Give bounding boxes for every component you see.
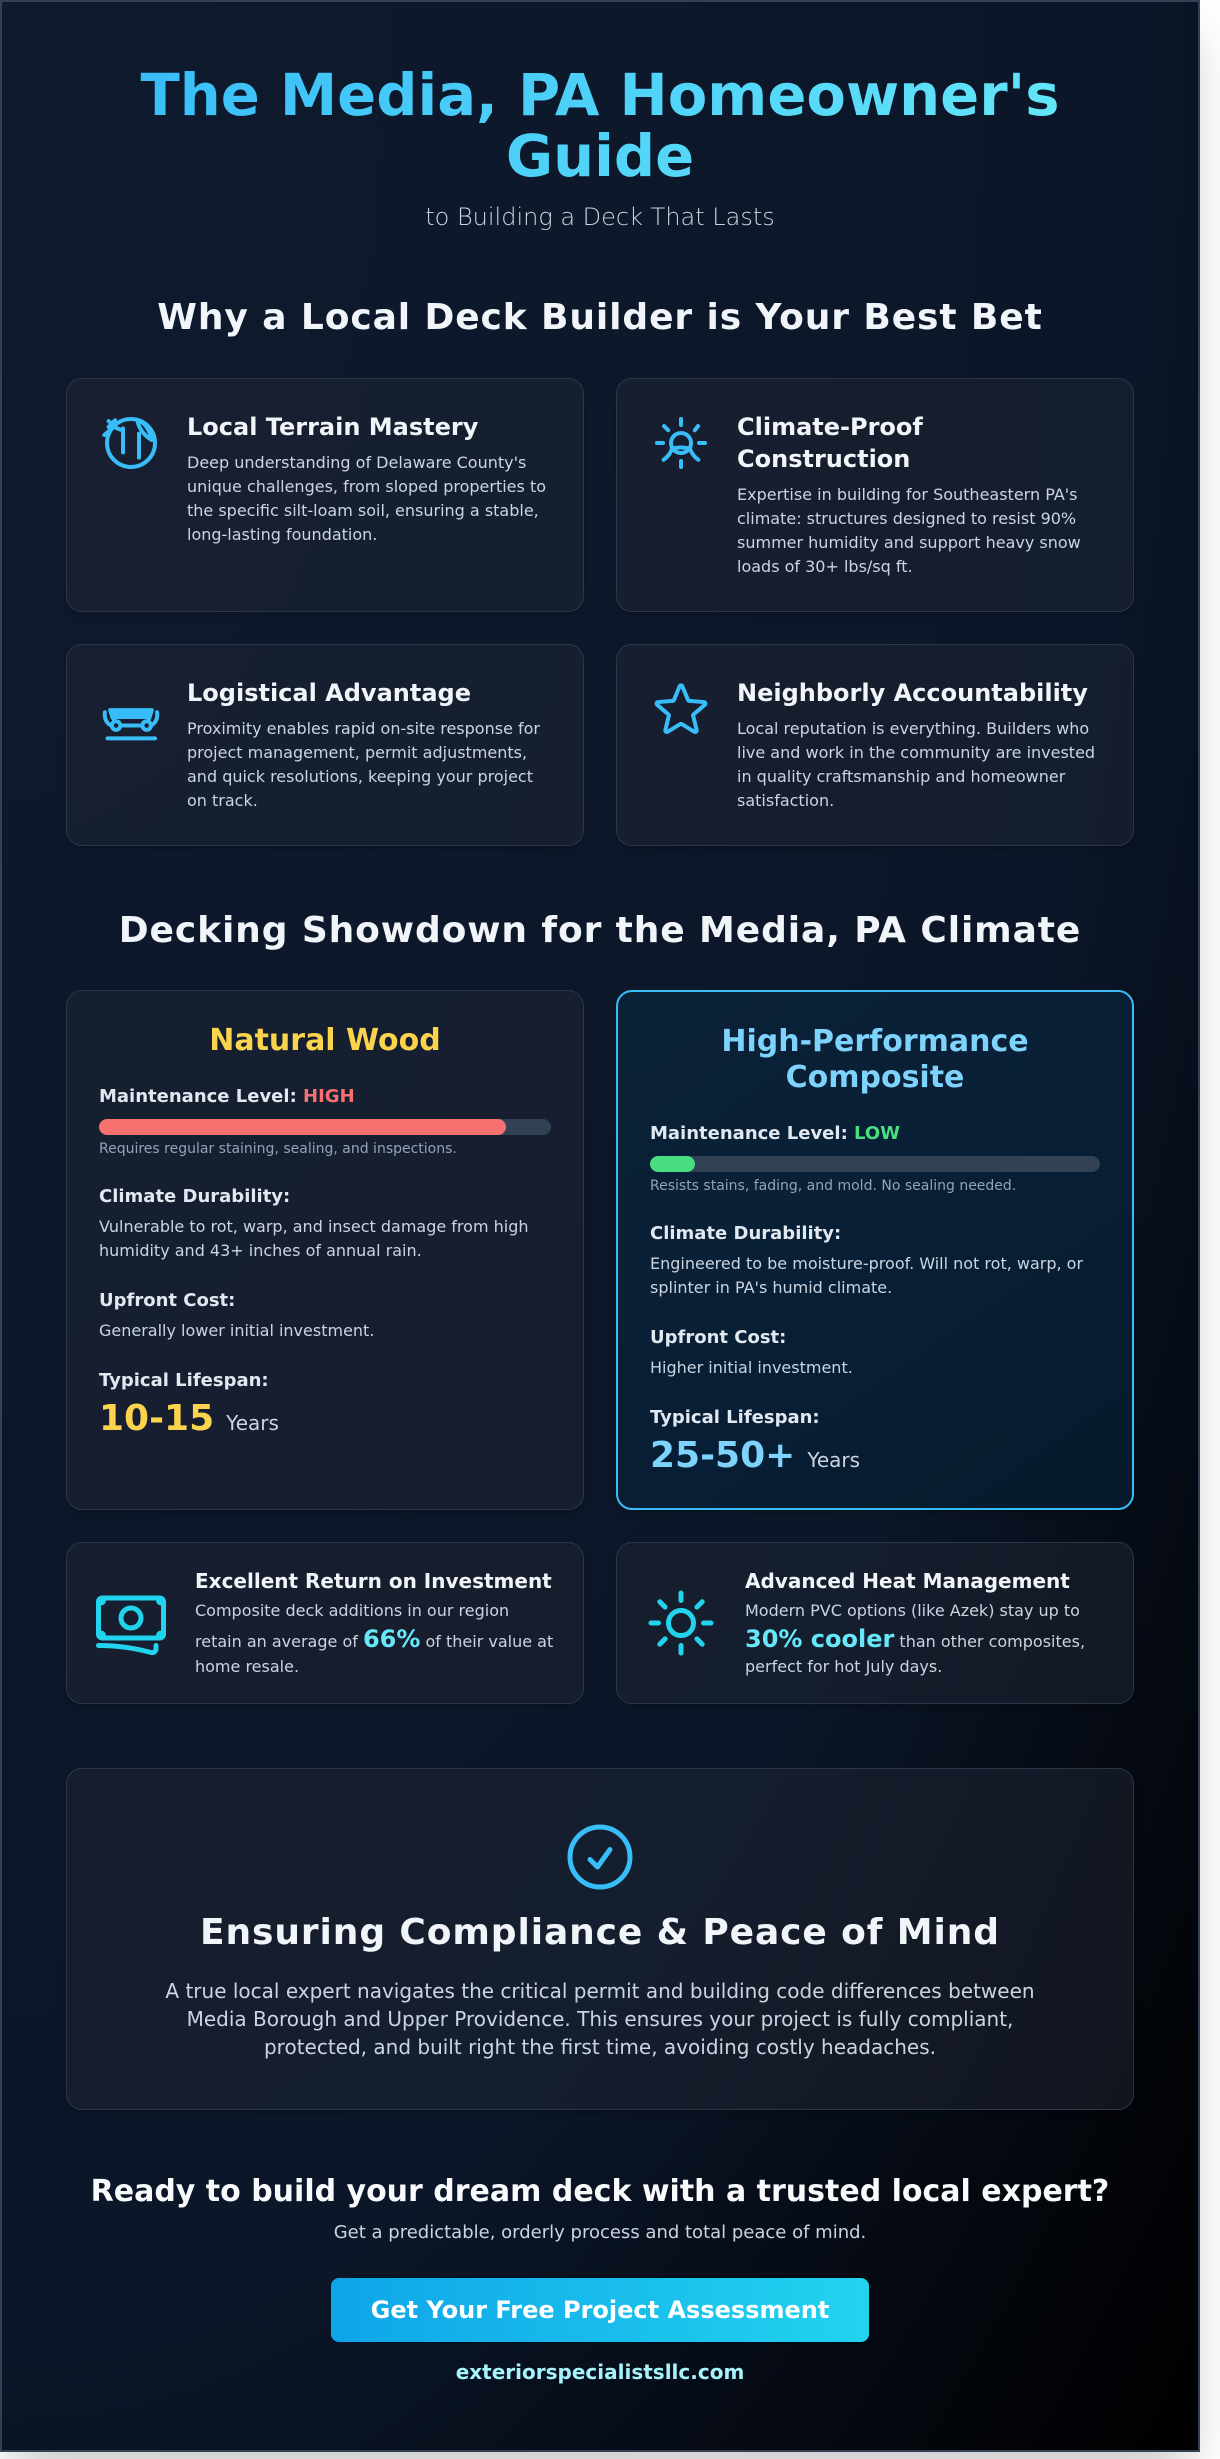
- text: local terrain mastery: the specific silt-loam soil, ensuring a stable,: [187, 501, 539, 520]
- text: logistical advantage: Proximity enables rapid on-site response for: [187, 719, 540, 738]
- text: return on investment: Composite deck additions in our region: [195, 1601, 509, 1620]
- heading: decking showdown: Decking Showdown for the Media, PA Climate: [119, 910, 1081, 951]
- text: compliance: protected, and built right the first time, avoiding costly headaches.: [264, 2035, 936, 2059]
- panel: return on investment: [66, 1542, 584, 1704]
- climate durability: humidity and 43+ inches of annual rain.: [99, 1241, 422, 1260]
- typical lifespan: [650, 1407, 860, 1476]
- call to action subtext: Get a predictable, orderly process and total peace of mind.: [334, 2222, 866, 2243]
- call to action heading: Ready to build your dream deck with a trusted local expert?: [91, 2174, 1109, 2209]
- button: [331, 2278, 869, 2342]
- title: Guide: [506, 122, 694, 190]
- text: logistical advantage: on track.: [187, 791, 258, 810]
- icon: globe terrain: [102, 417, 157, 469]
- text: neighborly accountability: live and work in the community are invested: [737, 743, 1095, 762]
- panel: compliance: [66, 1768, 1134, 2110]
- maintenance: low: [650, 1123, 1100, 1194]
- text: logistical advantage: project management, permit adjustments,: [187, 743, 527, 762]
- text: climate-proof construction: Construction: [737, 445, 910, 473]
- text: heat management: [745, 1569, 1085, 1676]
- climate durability: Climate Durability:: [650, 1223, 841, 1244]
- title: The Media, PA Homeowner's: [140, 62, 1060, 129]
- text: local terrain mastery: long-lasting foundation.: [187, 525, 377, 544]
- title: [140, 62, 1060, 190]
- text: neighborly accountability: satisfaction.: [737, 791, 834, 810]
- icon: vehicle: [102, 708, 160, 740]
- heading: composite: [721, 1024, 1029, 1095]
- text: heat management: perfect for hot July days.: [745, 1657, 942, 1676]
- panel: logistical advantage: [66, 644, 584, 846]
- icon: banknote: [96, 1596, 166, 1656]
- text: logistical advantage: Logistical Advantage: [187, 679, 471, 707]
- text: neighborly accountability: Local reputation is everything. Builders who: [737, 719, 1089, 738]
- upfront cost: [99, 1290, 374, 1340]
- text: neighborly accountability: [737, 679, 1095, 810]
- climate durability: [650, 1223, 1084, 1297]
- heading: natural wood: Natural Wood: [209, 1023, 441, 1058]
- upfront cost: Upfront Cost:: [99, 1290, 235, 1311]
- website link: exteriorspecialistsllc.com: [456, 2360, 744, 2384]
- heading: composite: Composite: [786, 1060, 964, 1095]
- heading: composite: High-Performance: [721, 1024, 1029, 1059]
- upfront cost: Upfront Cost:: [650, 1327, 786, 1348]
- text: local terrain mastery: Local Terrain Mastery: [187, 413, 478, 441]
- text: climate-proof construction: summer humidity and support heavy snow: [737, 533, 1081, 552]
- text: neighborly accountability: Neighborly Accountability: [737, 679, 1088, 707]
- text: heat management: 30% cooler than other composites,: [745, 1625, 1085, 1653]
- text: climate-proof construction: [737, 413, 1081, 576]
- text: heat management: Advanced Heat Management: [745, 1569, 1070, 1593]
- icon: sun: [648, 1590, 714, 1656]
- bar: 90 percent maintenance: [99, 1119, 551, 1135]
- typical lifespan: Typical Lifespan:: [650, 1407, 820, 1428]
- bar: 10 percent maintenance: [650, 1156, 1100, 1172]
- upfront cost: [650, 1327, 853, 1377]
- maintenance: high: Requires regular staining, sealing, and inspections.: [99, 1141, 457, 1157]
- maintenance: high: Maintenance Level: HIGH: [99, 1086, 355, 1107]
- text: heat management: Modern PVC options (like Azek) stay up to: [745, 1601, 1080, 1620]
- panel: natural wood: [66, 990, 584, 1510]
- text: return on investment: home resale.: [195, 1657, 299, 1676]
- typical lifespan: Years: [226, 1411, 279, 1435]
- text: local terrain mastery: [187, 413, 546, 544]
- panel: climate-proof construction: [616, 378, 1134, 612]
- typical lifespan: [99, 1370, 279, 1439]
- panel: neighborly accountability: [616, 644, 1134, 846]
- heading: why local: Why a Local Deck Builder is Your Best Bet: [157, 297, 1043, 338]
- climate durability: Vulnerable to rot, warp, and insect damage from high: [99, 1217, 528, 1236]
- text: local terrain mastery: unique challenges, from sloped properties to: [187, 477, 546, 496]
- text: logistical advantage: [187, 679, 540, 810]
- text: return on investment: Excellent Return on Investment: [195, 1569, 552, 1593]
- text: return on investment: [195, 1569, 553, 1676]
- icon: check circle: [568, 1824, 632, 1890]
- typical lifespan: 10-15: [99, 1398, 214, 1439]
- climate durability: Climate Durability:: [99, 1186, 290, 1207]
- text: neighborly accountability: in quality craftsmanship and homeowner: [737, 767, 1065, 786]
- maintenance: high: [99, 1086, 551, 1157]
- typical lifespan: 25-50+: [650, 1435, 795, 1476]
- text: climate-proof construction: Expertise in building for Southeastern PA's: [737, 485, 1078, 504]
- text: local terrain mastery: Deep understanding of Delaware County's: [187, 453, 526, 472]
- panel: high-performance composite: [616, 990, 1134, 1510]
- heading: compliance: Ensuring Compliance & Peace of Mind: [200, 1912, 1000, 1953]
- text: climate-proof construction: climate: structures designed to resist 90%: [737, 509, 1076, 528]
- typical lifespan: Typical Lifespan:: [99, 1370, 269, 1391]
- button: Get Your Free Project Assessment: [371, 2296, 829, 2324]
- text: logistical advantage: and quick resolutions, keeping your project: [187, 767, 533, 786]
- icon: sun shelter: [655, 417, 707, 469]
- panel: heat management: [616, 1542, 1134, 1704]
- subtitle: to Building a Deck That Lasts: [425, 203, 775, 231]
- text: compliance: [165, 1979, 1035, 2059]
- climate durability: splinter in PA's humid climate.: [650, 1278, 892, 1297]
- maintenance: low: Maintenance Level: LOW: [650, 1123, 900, 1144]
- typical lifespan: Years: [807, 1448, 860, 1472]
- maintenance: low: Resists stains, fading, and mold. No sealing needed.: [650, 1178, 1016, 1194]
- upfront cost: Generally lower initial investment.: [99, 1321, 374, 1340]
- text: climate-proof construction: loads of 30+ lbs/sq ft.: [737, 557, 913, 576]
- climate durability: Engineered to be moisture-proof. Will not rot, warp, or: [650, 1254, 1083, 1273]
- icon: star: [654, 683, 708, 734]
- panel: local terrain mastery: [66, 378, 584, 612]
- text: return on investment: retain an average of 66% of their value at: [195, 1625, 553, 1653]
- text: compliance: Media Borough and Upper Providence. This ensures your project is fully compliant,: [187, 2007, 1013, 2031]
- text: compliance: A true local expert navigates the critical permit and building code differences between: [165, 1979, 1035, 2003]
- climate durability: [99, 1186, 528, 1260]
- text: climate-proof construction: Climate-Proof: [737, 413, 923, 441]
- upfront cost: Higher initial investment.: [650, 1358, 853, 1377]
